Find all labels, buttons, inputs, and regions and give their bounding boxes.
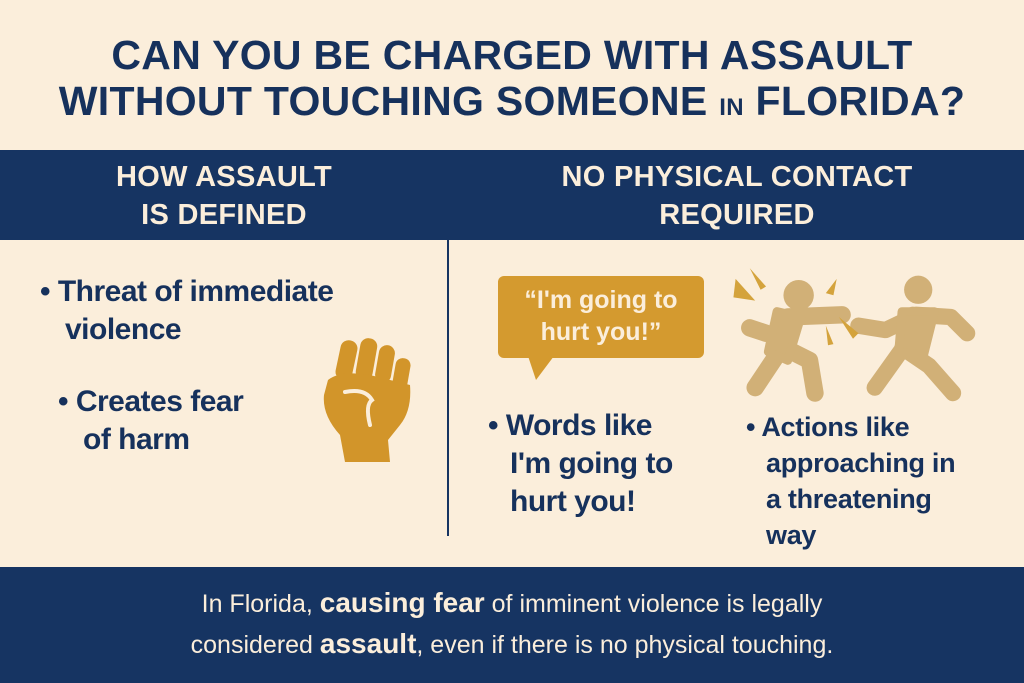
bullet: words: I'm going to xyxy=(510,447,673,480)
header band xyxy=(0,150,1024,240)
speech bubble: hurt you!” xyxy=(541,318,661,346)
bullet: actions xyxy=(746,412,955,550)
icon: threatening figures xyxy=(733,268,976,402)
bullet: actions: • Actions like xyxy=(746,412,909,442)
title xyxy=(58,32,965,124)
speech bubble xyxy=(498,276,704,358)
footer band xyxy=(0,567,1024,683)
title: CAN YOU BE CHARGED WITH ASSAULT xyxy=(111,32,913,78)
heading: how assault is defined: HOW ASSAULT xyxy=(116,161,332,193)
left bullets: • Threat of immediate xyxy=(40,275,333,308)
bullet: actions: approaching in xyxy=(766,448,955,478)
bullet: actions: way xyxy=(766,520,816,550)
heading: how assault is defined xyxy=(116,161,332,231)
left bullets: violence xyxy=(65,313,181,346)
icon: fist xyxy=(324,338,411,462)
left bullets: • Creates fear xyxy=(58,385,243,418)
title: WITHOUT TOUCHING SOMEONE IN FLORIDA? xyxy=(59,78,965,124)
heading: how assault is defined: IS DEFINED xyxy=(141,199,307,231)
bullet: words: hurt you! xyxy=(510,485,635,518)
heading: no physical contact: REQUIRED xyxy=(659,199,815,231)
left bullets: of harm xyxy=(83,423,190,456)
left bullets xyxy=(40,275,333,456)
heading: no physical contact xyxy=(561,161,913,231)
footer band: considered assault, even if there is no physical touching. xyxy=(191,628,833,659)
heading: no physical contact: NO PHYSICAL CONTACT xyxy=(561,161,913,193)
speech bubble: “I'm going to xyxy=(524,286,678,314)
bullet: words xyxy=(488,409,673,518)
bullet: actions: a threatening xyxy=(766,484,932,514)
bullet: words: • Words like xyxy=(488,409,652,442)
footer band: In Florida, causing fear of imminent violence is legally xyxy=(202,587,822,618)
